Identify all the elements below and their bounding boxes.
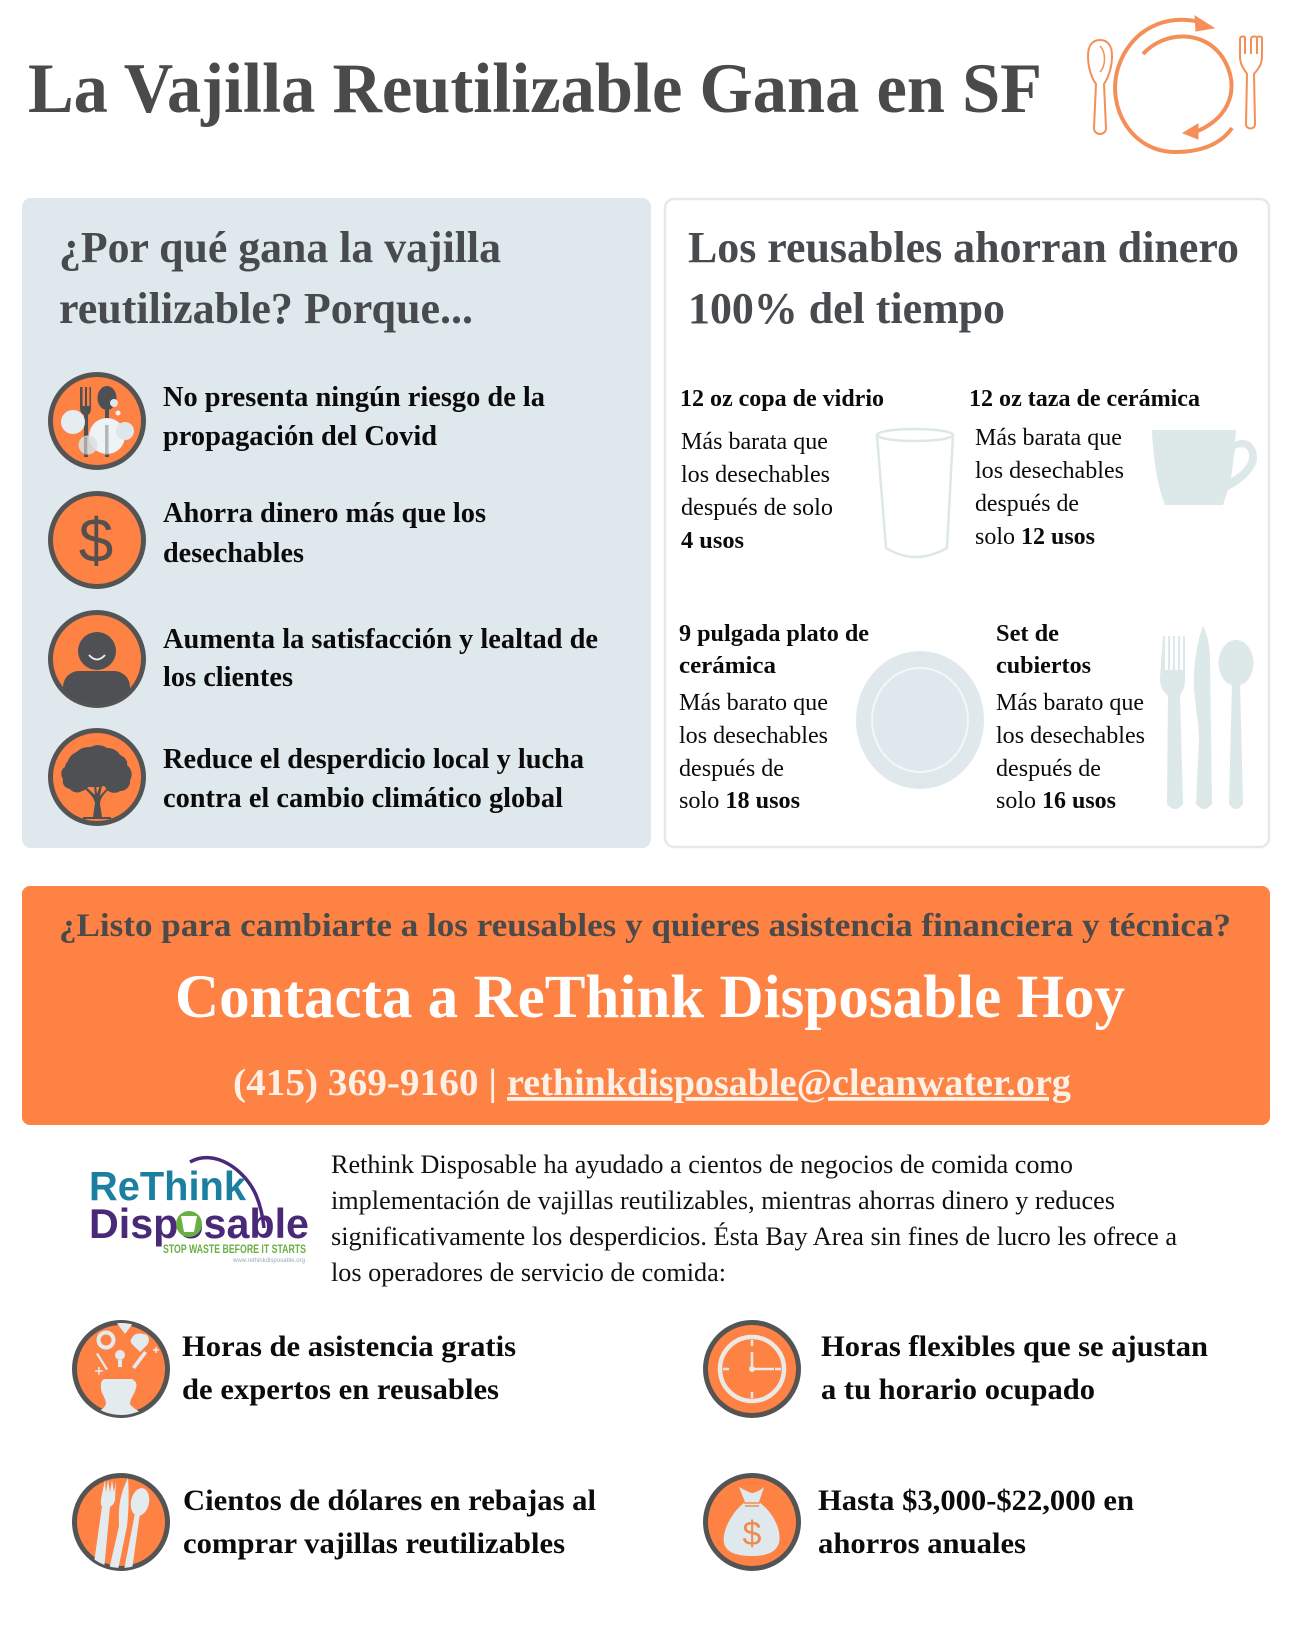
panel heading: ¿Por qué gana la vajilla [59,223,501,272]
logo: ReThink Disposable: ReThink [89,1163,246,1209]
item: plate: solo 18 usos [679,788,800,814]
panel heading: Los reusables ahorran dinero [688,223,1239,272]
icon: dollar: $ [79,507,113,576]
panel: reusables save money [665,199,1269,847]
benefit text: reduces waste [163,744,584,814]
item: plate: los desechables [679,723,828,749]
benefit text: saves money [163,498,486,569]
benefit text: customer loyalty: Aumenta la satisfacción y lealtad de [163,624,598,655]
benefit: rebates: comprar vajillas reutilizables [183,1527,565,1560]
icon: plate [856,651,984,789]
panel heading [59,223,501,333]
logo: ReThink Disposable: Disposable [89,1200,309,1247]
item: cutlery set: después de [996,756,1101,782]
benefit: rebates: Cientos de dólares en rebajas al [183,1484,596,1517]
item: glass: 4 usos [681,528,744,554]
item: glass: Más barata que [681,429,828,455]
logo: ReThink Disposable: www.rethinkdisposable.org [232,1257,305,1264]
logo: ReThink Disposable [89,1158,309,1264]
icon: cutlery [1160,626,1254,809]
benefit: annual savings: ahorros anuales [818,1527,1026,1560]
benefit text: reduces waste: Reduce el desperdicio local y lucha [163,744,584,775]
item: cup: 12 oz taza de cerámica [969,386,1200,412]
benefit: free expert hours: Horas de asistencia gratis [182,1330,516,1363]
item: cutlery set: cubiertos [996,653,1091,679]
benefit: annual savings [818,1484,1134,1560]
item: cup: Más barata que [975,425,1122,451]
logo: ReThink Disposable: STOP WASTE BEFORE IT STARTS [163,1244,306,1256]
item: cup: después de [975,491,1079,517]
text block: about Rethink Disposable: Rethink Disposable ha ayudado a cientos de negocios de comida como [331,1150,1073,1179]
item: plate: 9 pulgada plato de [679,621,869,647]
text block: about Rethink Disposable: los operadores de servicio de comida: [331,1258,726,1287]
item: glass [680,386,884,554]
text block: about Rethink Disposable [331,1150,1177,1287]
item: cutlery set: solo 16 usos [996,788,1116,814]
item: plate: cerámica [679,653,776,679]
item: plate: después de [679,756,784,782]
benefit: flexible hours [821,1330,1208,1406]
icon: money bag [706,1476,798,1568]
benefit: flexible hours: a tu horario ocupado [821,1373,1095,1406]
icon: money bag: $ [743,1515,762,1553]
banner headline: Contacta a ReThink Disposable Hoy [175,964,1125,1031]
text block: about Rethink Disposable: implementación de vajillas reutilizables, mientras ahorras dinero y reduces [331,1186,1115,1215]
benefit text: reduces waste: contra el cambio climático global [163,783,563,814]
panel heading: 100% del tiempo [688,284,1005,333]
benefit text: no covid risk [163,382,545,452]
benefit: free expert hours: de expertos en reusables [182,1373,499,1406]
item: cutlery set: los desechables [996,723,1145,749]
text block: about Rethink Disposable: significativamente los desperdicios. Ésta Bay Area sin fines de lucro les ofrece a [331,1222,1177,1251]
icon: cutlery rebate [74,1476,168,1570]
item: plate [679,621,869,814]
banner question: ¿Listo para cambiarte a los reusables y quieres asistencia financiera y técnica? [59,908,1231,944]
panel heading: reutilizable? Porque... [59,284,473,333]
title: La Vajilla Reutilizable Gana en SF [28,50,1042,128]
item: cup [969,386,1200,550]
banner: contact call to action [22,886,1270,1125]
item: glass: después de solo [681,495,833,521]
benefit: flexible hours: Horas flexibles que se ajustan [821,1330,1208,1363]
item: cup: solo 12 usos [975,524,1095,550]
item: glass: los desechables [681,462,830,488]
benefit text: customer loyalty: los clientes [163,662,293,693]
icon: dollar [50,494,144,586]
item: cutlery set [996,621,1145,814]
benefit text: saves money: desechables [163,538,304,569]
phone number: (415) 369-9160 | [233,1062,497,1104]
benefit text: no covid risk: No presenta ningún riesgo de la [163,382,545,413]
item: cutlery set: Set de [996,621,1059,647]
item: plate: Más barato que [679,690,828,716]
benefit: free expert hours [182,1330,516,1406]
icon: tree [50,730,144,824]
icon: expert ideas [74,1322,168,1416]
benefit text: customer loyalty [163,624,598,693]
icon: glass [877,429,953,557]
panel heading [688,223,1239,333]
icon: smiling customer [50,612,144,716]
item: cup: los desechables [975,458,1124,484]
item: glass: 12 oz copa de vidrio [680,386,884,412]
item: cutlery set: Más barato que [996,690,1144,716]
benefit text: no covid risk: propagación del Covid [163,421,437,452]
panel: why reusable wins [22,198,651,848]
icon: cup [1152,430,1257,505]
icon: clock [706,1322,798,1416]
email: rethinkdisposable@cleanwater.org [507,1062,1071,1104]
icon: plate with recycling arrows and cutlery [1088,16,1262,152]
icon: clean dishes [50,374,144,468]
benefit text: saves money: Ahorra dinero más que los [163,498,486,529]
benefit: annual savings: Hasta $3,000-$22,000 en [818,1484,1134,1517]
benefit: rebates [183,1484,596,1560]
